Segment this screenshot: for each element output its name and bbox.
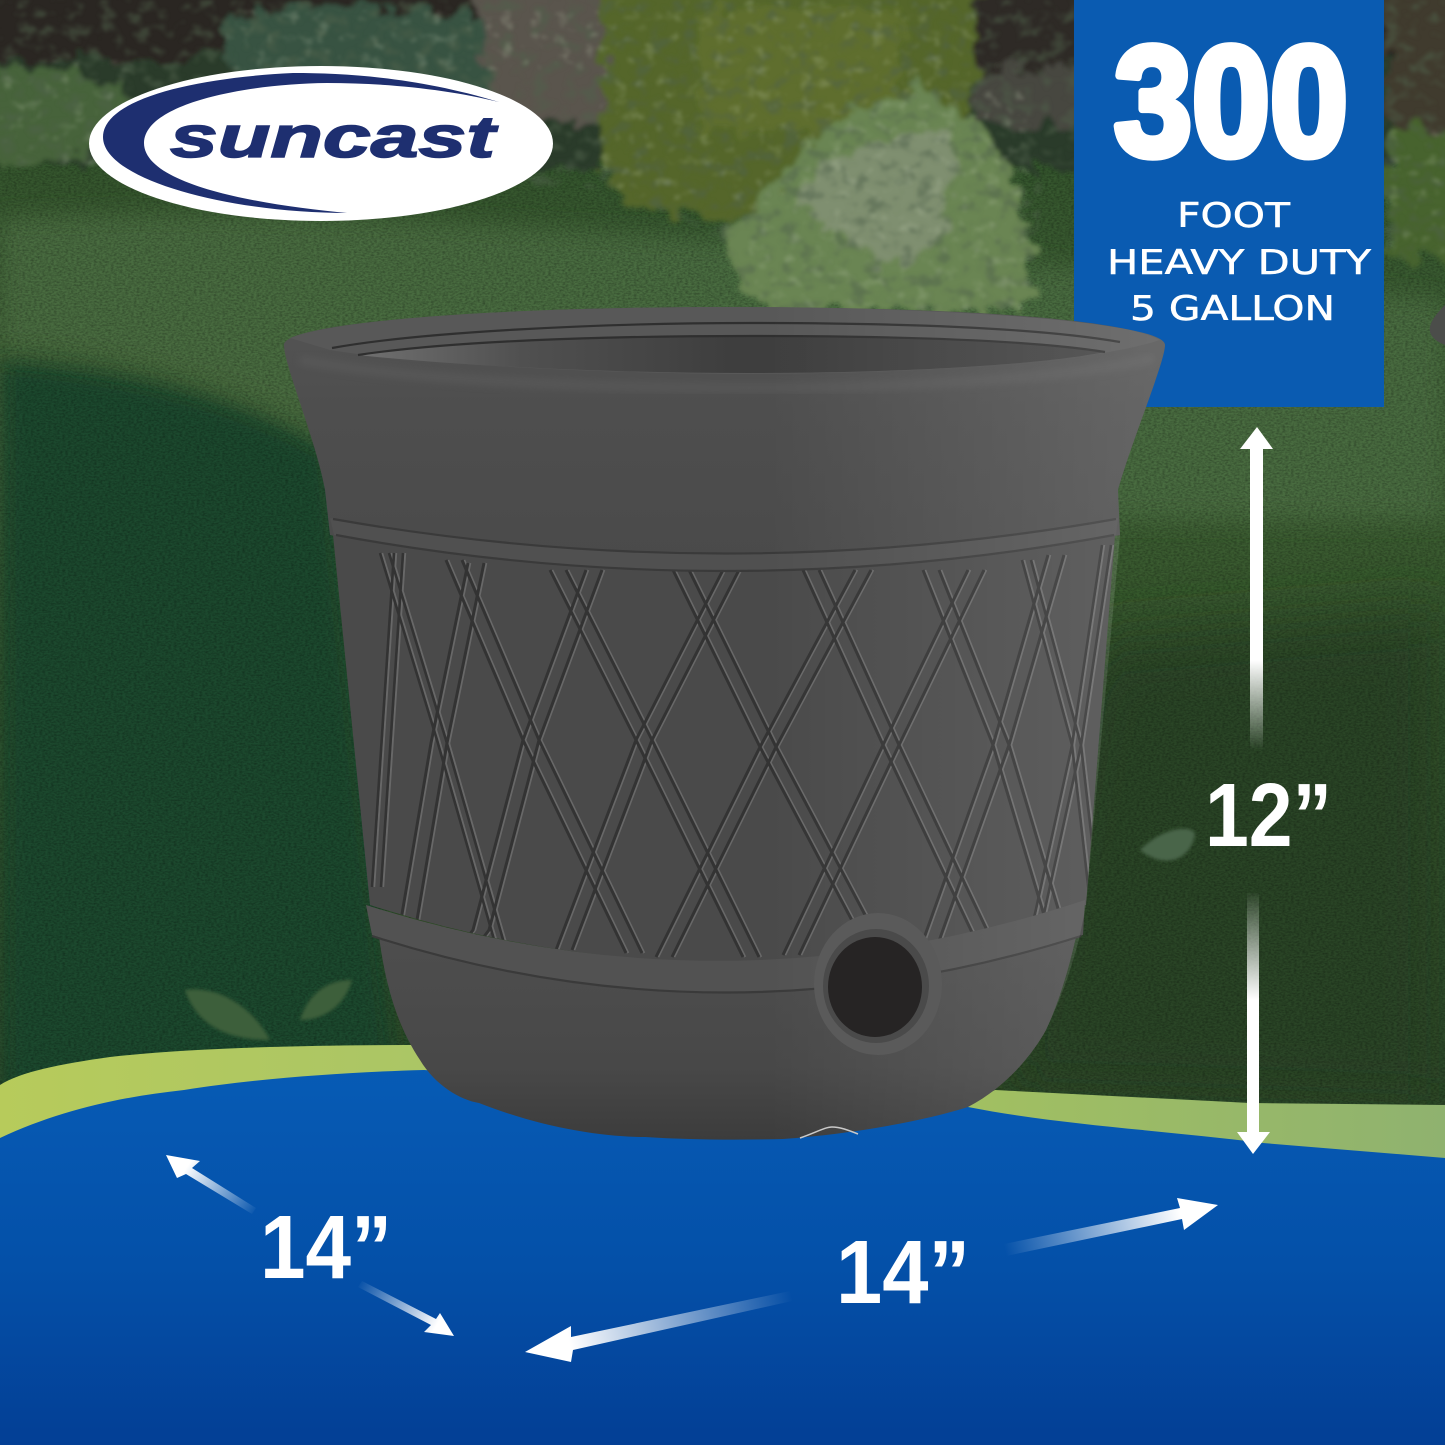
arrow: height down <box>1237 893 1270 1154</box>
left shrubs <box>0 67 135 165</box>
product photo: hose pot <box>284 307 1165 1140</box>
pink bush <box>470 0 620 130</box>
big number 300: 300 <box>1114 15 1348 189</box>
grass texture <box>0 150 1445 1120</box>
arrow: height up <box>1240 427 1273 750</box>
shadowed lawn area <box>0 360 400 1100</box>
lawn lower right <box>1000 610 1445 1110</box>
plant leaves right <box>1140 829 1195 861</box>
arrow: depth up-left <box>166 1155 256 1214</box>
green left swoosh <box>0 1045 450 1140</box>
foliage mottling <box>0 0 1445 310</box>
blue ground <box>0 1070 1445 1445</box>
blue ground swoosh <box>0 1045 1445 1445</box>
dark structure <box>975 0 1085 70</box>
box caption: HEAVY DUTY <box>1107 243 1371 283</box>
leaf at lawn <box>185 980 352 1040</box>
rim lip front highlight <box>300 358 1155 388</box>
right shrubs <box>1384 0 1445 140</box>
pale leafy plant <box>720 90 1031 310</box>
logo wordmark: suncast <box>170 105 499 170</box>
green right swoosh <box>960 1090 1445 1165</box>
upper band <box>330 518 1118 571</box>
label: 14 inch width: 14” <box>836 1223 970 1323</box>
label: 12 inch height: 12” <box>1205 766 1332 866</box>
pot collar <box>284 307 1165 575</box>
box caption <box>1107 196 1371 329</box>
lower band <box>366 900 1085 992</box>
rim top surface <box>290 307 1160 374</box>
dark fence <box>0 0 1445 90</box>
hose hole <box>814 913 942 1055</box>
label: 14 inch depth: 14” <box>260 1198 392 1298</box>
background foliage <box>0 0 1445 310</box>
arrow: width right <box>1004 1198 1218 1256</box>
bottom notch <box>800 1127 858 1138</box>
arrow: depth down-right <box>358 1281 454 1336</box>
box caption: 5 GALLON <box>1130 289 1335 329</box>
rim groove lines <box>332 323 1120 355</box>
lower band lines <box>372 936 1081 992</box>
lit lawn band <box>0 215 1445 520</box>
feature box <box>1074 0 1384 407</box>
box caption: FOOT <box>1177 196 1290 236</box>
olive tree <box>600 0 978 227</box>
rim opening <box>358 336 1105 373</box>
right side sheen <box>284 307 1165 1139</box>
rock at right edge <box>1430 305 1445 345</box>
logo swoosh <box>103 73 499 213</box>
pot bowl <box>378 928 1078 1140</box>
lattice pattern <box>372 545 1113 960</box>
pot tapered body <box>333 535 1115 962</box>
upper band lines <box>333 519 1116 571</box>
arrow: width left <box>525 1291 792 1362</box>
suncast logo <box>89 66 553 221</box>
